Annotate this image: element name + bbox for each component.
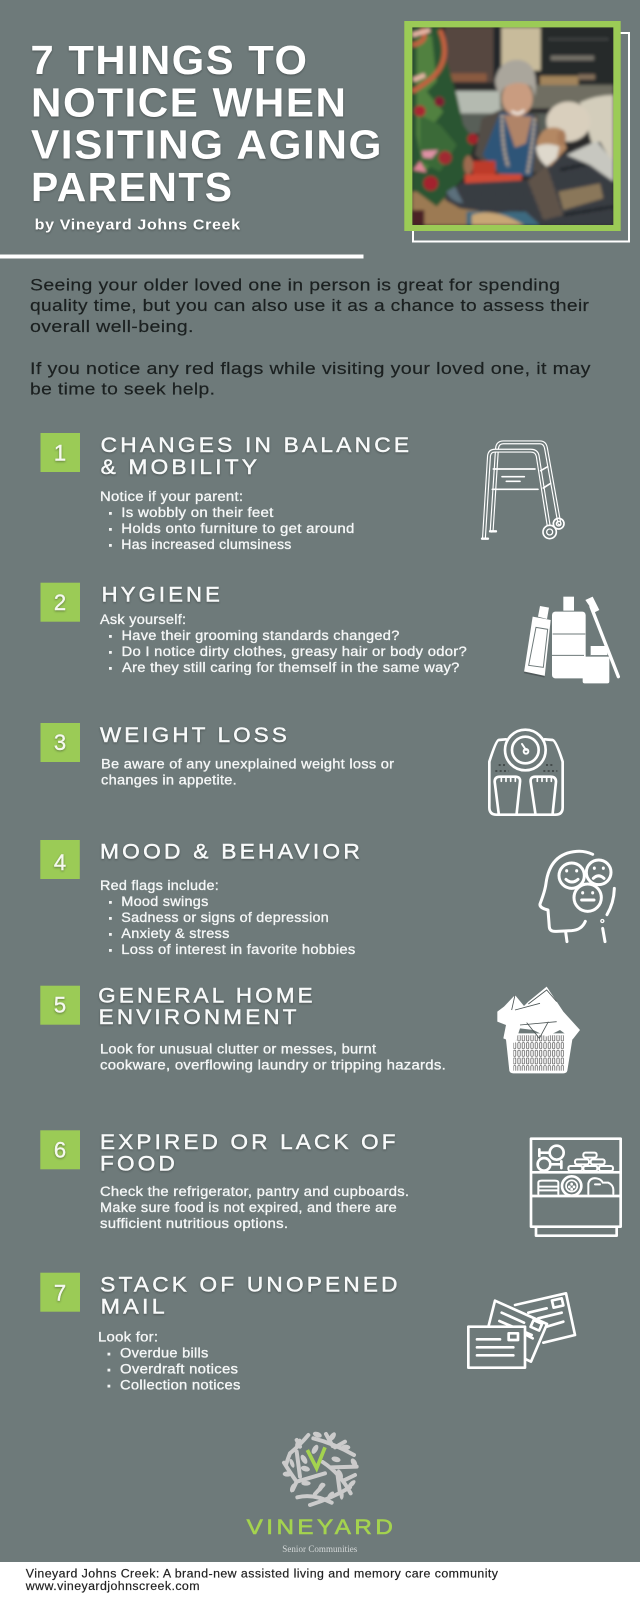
body 5: Look for unusual clutter or messes, burnt [100, 1041, 376, 1056]
intro text: overall well-being. [30, 317, 194, 336]
section 4: mood and behavior [40, 840, 614, 957]
body 6 [100, 1184, 409, 1231]
title [30, 37, 383, 210]
icon: laundry basket [497, 987, 580, 1073]
intro text: quality time, but you can also use it as a chance to assess their [30, 296, 589, 315]
logo wordmark: VINEYARD [247, 1516, 396, 1539]
section 2: hygiene [40, 583, 618, 683]
white offset frame [413, 33, 629, 242]
intro text: Seeing your older loved one in person is great for spending [30, 276, 560, 295]
title: PARENTS [31, 164, 234, 210]
heading 6: FOOD [100, 1153, 178, 1176]
footer [0, 1562, 640, 1600]
body 4: Loss of interest in favorite hobbies [121, 942, 356, 957]
body 7 [98, 1330, 241, 1393]
number badge 3 [40, 723, 80, 762]
body 2: Ask yourself: [100, 612, 186, 627]
heading 5 [98, 985, 316, 1029]
body 1: Has increased clumsiness [121, 537, 292, 552]
heading 6 [100, 1131, 399, 1176]
body 5: cookware, overflowing laundry or tripping hazards. [100, 1057, 446, 1072]
intro text: be time to seek help. [30, 380, 215, 398]
heading 7: MAIL [101, 1295, 168, 1318]
heading 7 [100, 1273, 401, 1318]
section 3: weight loss [40, 723, 563, 815]
photo: couple exchanging gifts by a Christmas tree [410, 25, 617, 228]
logo [247, 1431, 396, 1554]
title: NOTICE WHEN [31, 80, 348, 126]
number badge 4: 4 [54, 850, 66, 875]
icon: envelopes [468, 1293, 575, 1368]
number badge 1 [40, 433, 80, 472]
body 7: Overdue bills [120, 1346, 209, 1361]
icon: walker [482, 442, 564, 539]
number badge 6 [40, 1130, 80, 1169]
heading 6: EXPIRED OR LACK OF [100, 1131, 399, 1154]
number badge 7 [40, 1273, 80, 1312]
divider under title [0, 254, 364, 258]
heading 1: CHANGES IN BALANCE [101, 434, 412, 457]
icon: toiletries [524, 597, 618, 683]
byline: by Vineyard Johns Creek [35, 216, 241, 234]
body 2: Have their grooming standards changed? [122, 628, 400, 643]
heading 4: MOOD & BEHAVIOR [100, 841, 363, 864]
number badge 7: 7 [54, 1281, 66, 1306]
section 5: general home environment [40, 985, 580, 1073]
number badge 2 [40, 583, 80, 622]
number badge 5: 5 [54, 993, 66, 1018]
icon: food display case [531, 1139, 621, 1236]
logo mark [283, 1431, 359, 1505]
body 6: Make sure food is not expired, and there are [100, 1200, 397, 1215]
body 1 [100, 489, 355, 552]
body 6: Check the refrigerator, pantry and cupboards. [100, 1184, 409, 1199]
body 4: Mood swings [121, 894, 209, 909]
body 4: Red flags include: [100, 878, 219, 893]
body 2: Are they still caring for themself in the same way? [122, 660, 460, 675]
body 3 [101, 757, 395, 788]
green frame [404, 21, 621, 231]
icon: bathroom scale [489, 730, 563, 815]
footer: Vineyard Johns Creek: A brand-new assisted living and memory care community [26, 1569, 498, 1581]
body 1: Holds onto furniture to get around [121, 521, 355, 536]
body 7: Collection notices [120, 1378, 241, 1393]
title: 7 THINGS TO [30, 37, 308, 83]
body 3: changes in appetite. [101, 773, 237, 788]
number badge 4 [40, 840, 80, 879]
number badge 3: 3 [54, 730, 66, 755]
heading 1 [101, 434, 412, 479]
logo tagline: Senior Communities [282, 1544, 358, 1554]
body 4: Anxiety & stress [121, 926, 230, 941]
heading 3: WEIGHT LOSS [100, 724, 290, 747]
body 4 [100, 878, 356, 957]
heading 7: STACK OF UNOPENED [100, 1273, 401, 1296]
body 6: sufficient nutritious options. [100, 1216, 288, 1231]
body 1: Notice if your parent: [100, 489, 243, 504]
section 6: expired or lack of food [40, 1130, 621, 1236]
intro text [30, 276, 591, 398]
body 2: Do I notice dirty clothes, greasy hair or body odor? [122, 644, 467, 659]
body 3: Be aware of any unexplained weight loss or [101, 757, 395, 772]
heading 1: & MOBILITY [101, 456, 260, 479]
body 2 [100, 612, 467, 675]
number badge 2: 2 [54, 590, 66, 615]
body 7: Overdraft notices [120, 1362, 238, 1377]
footer: www.vineyardjohnscreek.com [25, 1581, 200, 1593]
icon: head with mood faces [540, 851, 614, 942]
body 7: Look for: [98, 1330, 158, 1345]
intro text: If you notice any red flags while visiting your loved one, it may [30, 359, 591, 378]
number badge 6: 6 [54, 1138, 66, 1163]
photo frame [404, 21, 629, 242]
heading 5: ENVIRONMENT [99, 1006, 300, 1029]
title: VISITING AGING [31, 122, 383, 168]
number badge 1: 1 [54, 440, 66, 466]
section 7: stack of unopened mail [40, 1273, 575, 1393]
section 1: changes in balance and mobility [40, 433, 564, 552]
body 5 [100, 1041, 446, 1072]
heading 2: HYGIENE [102, 584, 223, 607]
number badge 5 [40, 986, 80, 1025]
body 1: Is wobbly on their feet [121, 505, 274, 520]
heading 5: GENERAL HOME [98, 985, 316, 1008]
body 4: Sadness or signs of depression [121, 910, 329, 925]
